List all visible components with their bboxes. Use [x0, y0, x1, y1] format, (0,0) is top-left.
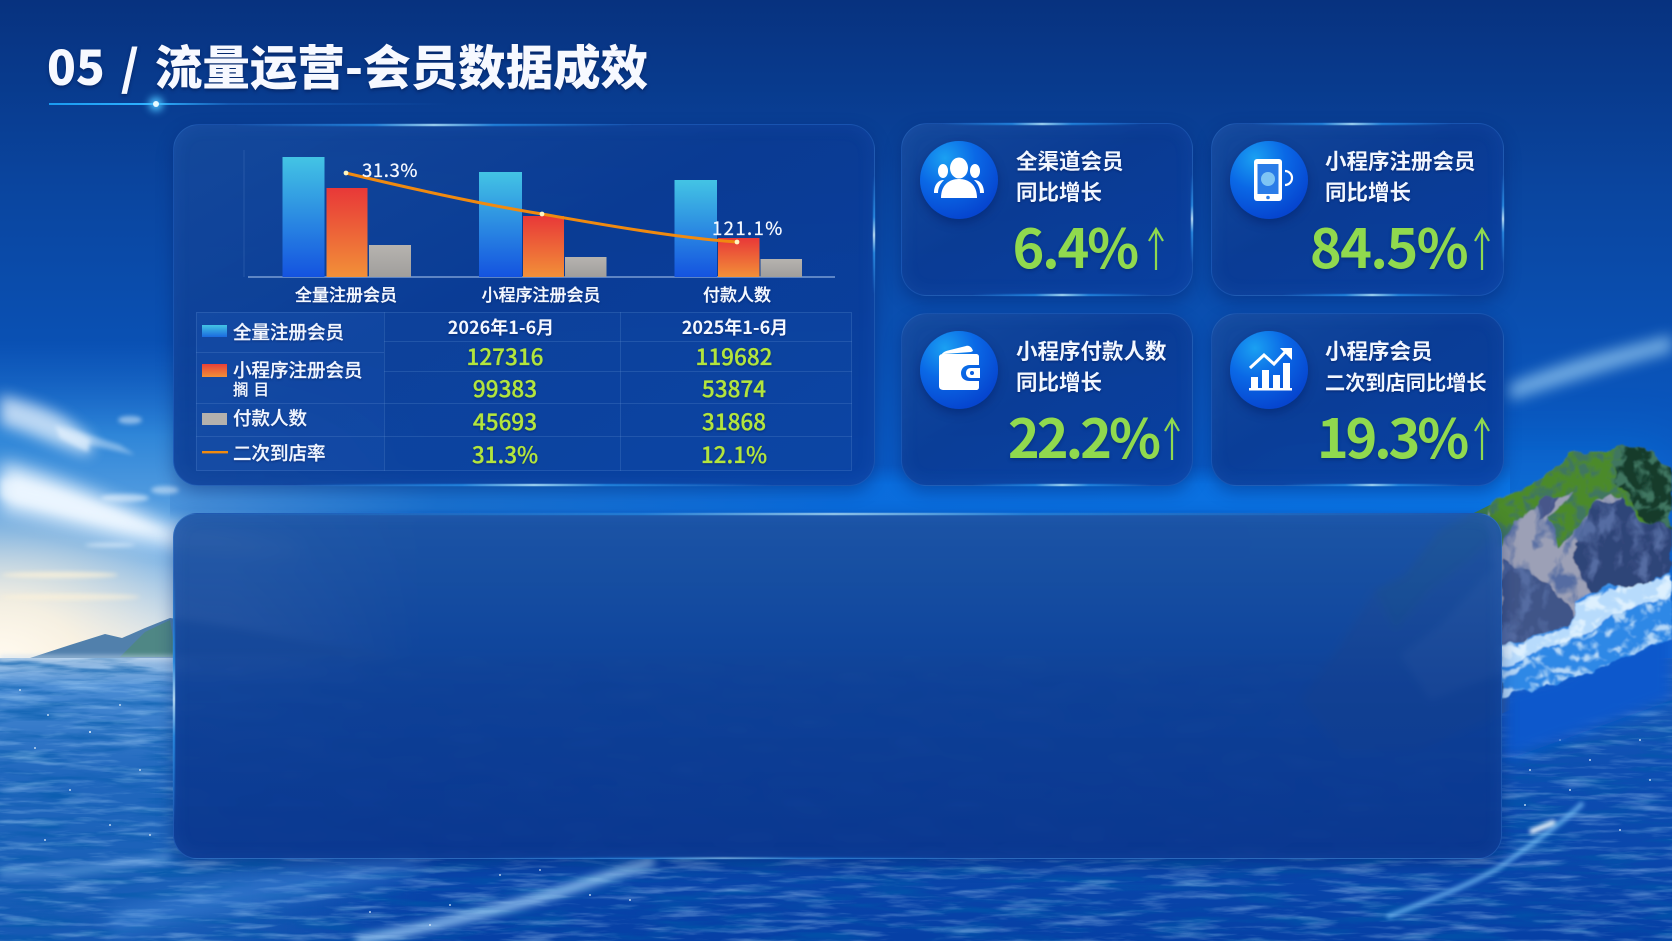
title: 05 / 流量运营-会员数据成效	[47, 30, 648, 99]
icon: members	[920, 141, 998, 219]
chart category labels: 小程序注册会员	[482, 281, 600, 306]
chart category labels: 全量注册会员	[295, 281, 397, 306]
panel: member data chart and table	[173, 124, 875, 486]
icon: phone	[1230, 141, 1308, 219]
title underline	[49, 92, 395, 116]
data table: 2026年1-6月	[448, 314, 554, 340]
arrow up	[1474, 417, 1490, 460]
sea	[0, 658, 1672, 941]
data table	[196, 174, 852, 471]
icon: wallet	[920, 331, 998, 409]
card: 小程序付款人数同比增长	[901, 313, 1193, 486]
group: 全量注册会员 bars	[282, 157, 411, 277]
card label: 全渠道会员 同比增长	[1016, 145, 1124, 207]
arrow up	[1148, 227, 1164, 270]
data table: 搁目	[233, 378, 274, 400]
group: 付款人数 bars	[674, 180, 802, 277]
data table: 45693	[473, 405, 537, 437]
clouds left	[0, 387, 185, 600]
left sky	[0, 367, 353, 657]
data table: 二次到店率	[233, 440, 326, 466]
data table: 全量注册会员	[233, 319, 344, 345]
island behind panel	[1300, 505, 1510, 750]
data table: 119682	[696, 340, 772, 372]
sea sparkles	[19, 689, 1651, 926]
data table: 小程序注册会员	[233, 357, 363, 383]
value 22.2%: 22.2%	[1008, 395, 1158, 474]
bar and line chart	[244, 150, 835, 278]
card: 小程序注册会员同比增长	[1211, 123, 1504, 296]
sea light streaks	[1387, 803, 1583, 917]
card label: 小程序付款人数 同比增长	[1016, 335, 1167, 397]
icon: rising bar chart	[1230, 331, 1308, 409]
chart category labels: 付款人数	[703, 281, 771, 306]
chart category labels	[295, 281, 771, 306]
value 6.4%: 6.4%	[1013, 205, 1137, 284]
card label: 小程序会员 二次到店同比增长	[1325, 335, 1487, 396]
far mountain left	[30, 618, 400, 658]
data table: 99383	[473, 372, 537, 404]
data table: 12.1%	[701, 438, 767, 470]
group: 小程序注册会员 bars	[479, 172, 606, 277]
panel: large empty content area	[173, 513, 1502, 859]
value 19.3%: 19.3%	[1317, 395, 1466, 474]
data label 121.1%: 121.1%	[712, 215, 784, 241]
arrow up	[1164, 417, 1180, 460]
data table: 2025年1-6月	[682, 314, 788, 340]
arrow up	[1474, 227, 1490, 270]
data table: 127316	[467, 340, 543, 372]
line: 二次到店率	[344, 171, 739, 244]
data table: 53874	[702, 372, 766, 404]
data table: 31868	[702, 405, 766, 437]
data table: 付款人数	[233, 405, 307, 431]
sky glow right	[1250, 450, 1672, 520]
value 84.5%: 84.5%	[1310, 205, 1467, 284]
card: 全渠道会员同比增长	[901, 123, 1193, 296]
island rock, vegetation and foam	[1480, 440, 1672, 700]
data label 31.3%: 31.3%	[362, 157, 418, 183]
clouds right	[1508, 335, 1672, 400]
card: 小程序会员二次到店同比增长	[1211, 313, 1504, 486]
card label: 小程序注册会员 同比增长	[1325, 145, 1476, 207]
data table: 31.3%	[472, 438, 538, 470]
deep water under the wave	[1502, 625, 1672, 760]
